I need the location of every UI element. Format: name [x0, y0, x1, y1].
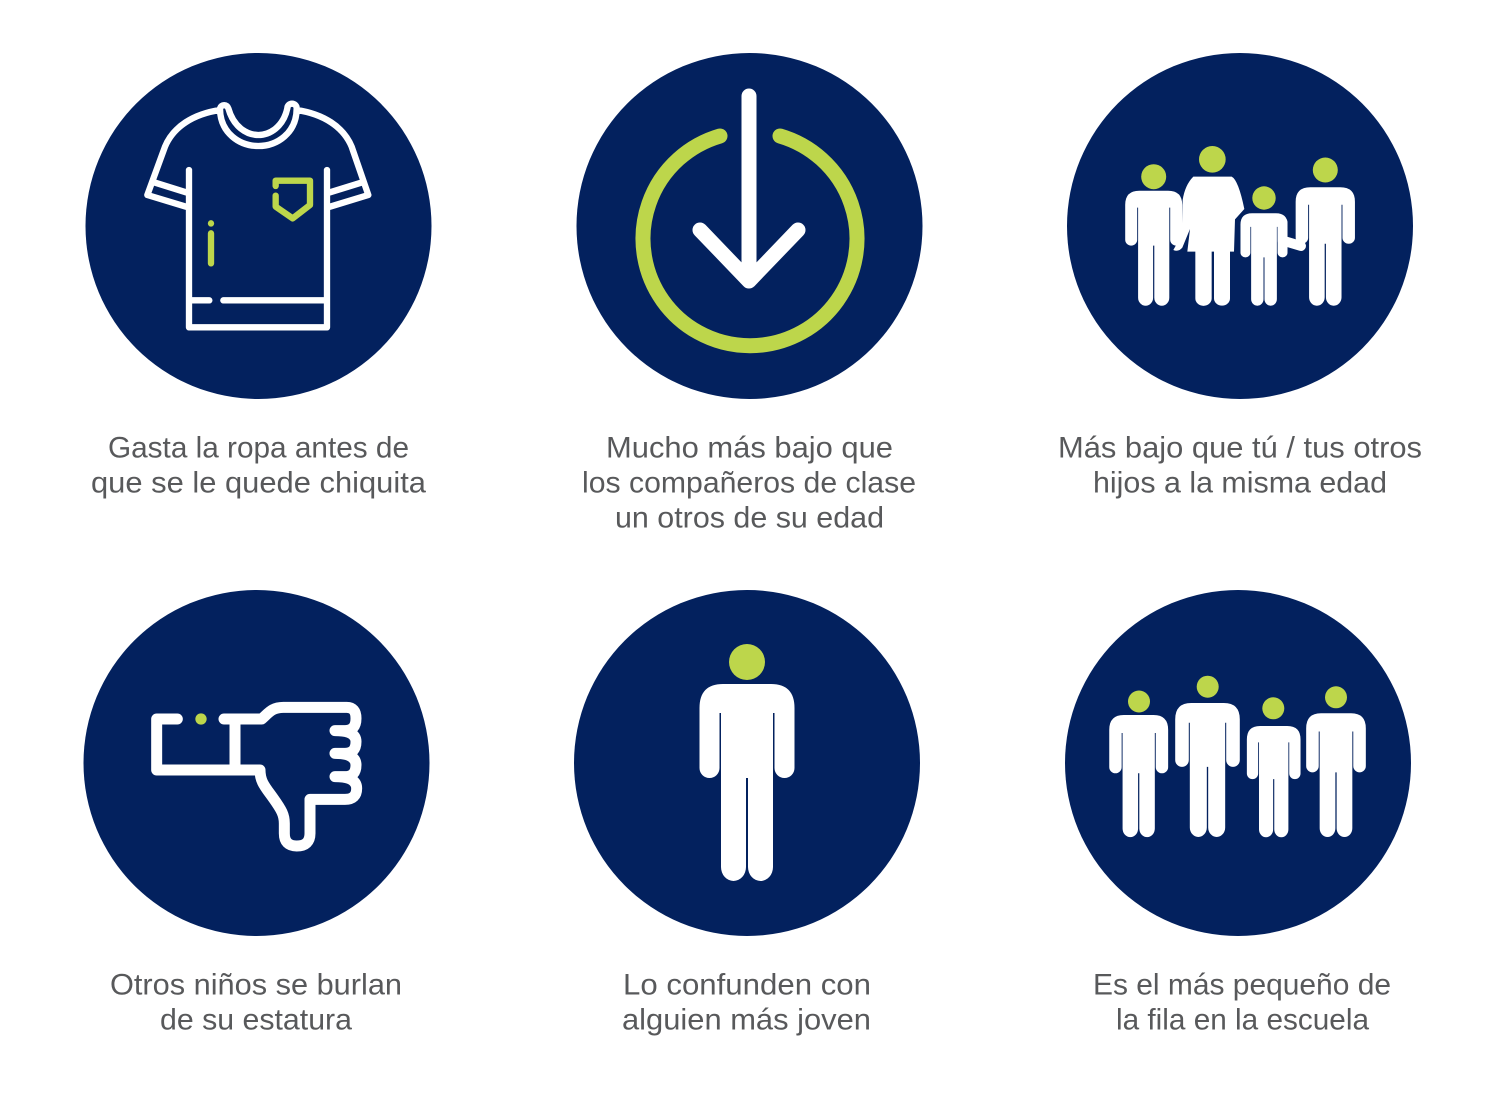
circle: shirt background [86, 53, 432, 399]
figure: man [1125, 164, 1182, 306]
panel: teasing [84, 590, 430, 1036]
panel: family [1058, 53, 1422, 500]
icon: power ring with down arrow [643, 96, 857, 346]
icon: t-shirt [147, 104, 368, 327]
caption: Mucho más bajo que [606, 432, 893, 464]
figure: child two [1175, 676, 1240, 837]
caption: Gasta la ropa antes de [108, 432, 409, 464]
icon: thumbs down [157, 707, 357, 846]
caption: la fila en la escuela [1116, 1004, 1370, 1036]
caption: de su estatura [160, 1004, 353, 1036]
figure: child three [1247, 697, 1301, 837]
panel: height arrow [576, 53, 922, 534]
icon: four children in line [1109, 676, 1366, 837]
caption [1058, 432, 1422, 500]
caption: los compañeros de clase [582, 466, 916, 500]
caption: alguien más joven [622, 1004, 871, 1036]
caption: Otros niños se burlan [110, 968, 402, 1002]
caption: un otros de su edad [615, 502, 884, 534]
panel: younger [574, 590, 920, 1036]
figure: woman [1173, 146, 1244, 306]
panel: school line [1065, 590, 1411, 1036]
figure: child [1240, 186, 1301, 306]
caption [1093, 968, 1391, 1036]
circle: thumb background [84, 590, 430, 936]
figure: child one [1109, 690, 1168, 837]
circle: line background [1065, 590, 1411, 936]
icon: single person [700, 644, 794, 881]
icon: family of four [1125, 146, 1355, 306]
caption: Es el más pequeño de [1093, 968, 1391, 1002]
figure: father [1296, 158, 1355, 306]
caption [91, 432, 427, 500]
circle: person background [574, 590, 920, 936]
caption: que se le quede chiquita [91, 466, 427, 500]
caption [622, 968, 871, 1036]
caption: Más bajo que tú / tus otros [1058, 432, 1422, 464]
caption: hijos a la misma edad [1093, 466, 1387, 500]
circle: arrow background [576, 53, 922, 399]
caption: Lo confunden con [623, 968, 871, 1002]
panel: shirt [86, 53, 432, 500]
circle: family background [1067, 53, 1413, 399]
figure: child four [1306, 686, 1366, 837]
caption [582, 432, 916, 534]
caption [110, 968, 402, 1036]
